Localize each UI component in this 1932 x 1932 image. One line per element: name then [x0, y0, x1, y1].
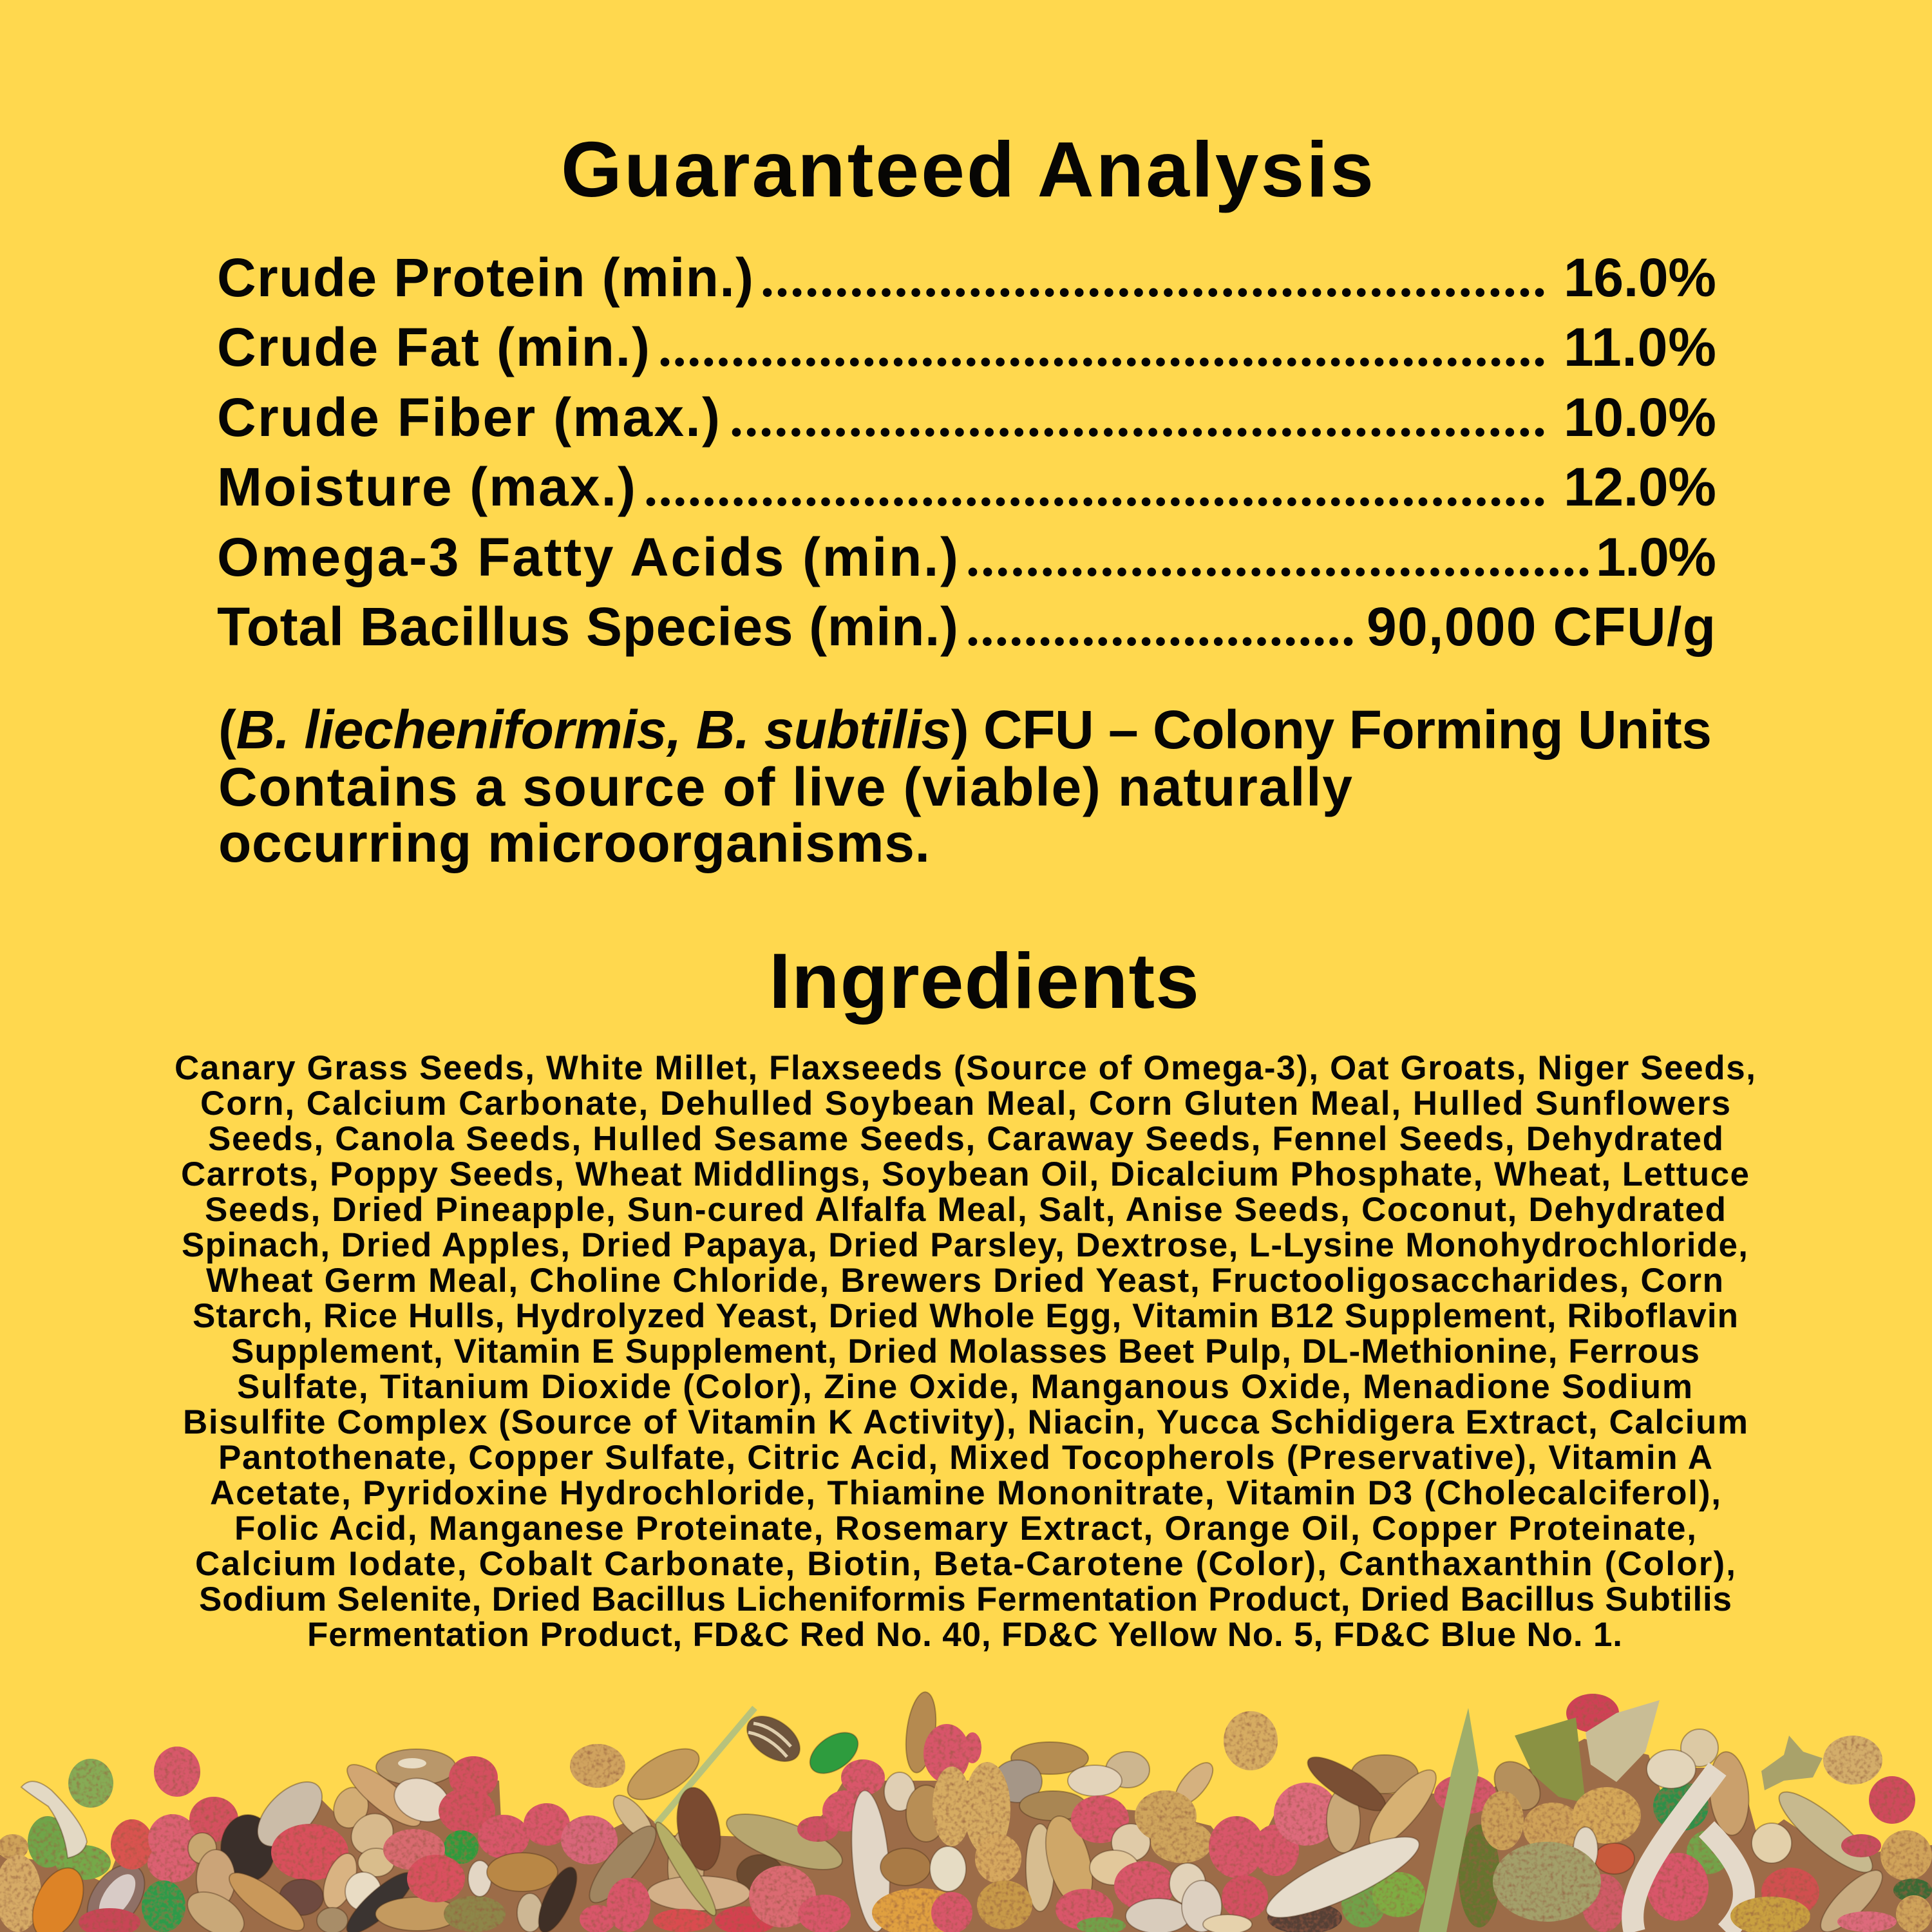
- row: crude fat: .............................................................: [658, 318, 1546, 378]
- row: crude fiber: 10.0%: [1564, 387, 1716, 448]
- row: omega-3: 1.0%: [1596, 527, 1716, 587]
- ingredients list: Canary Grass Seeds, White Millet, Flaxseeds (Source of Omega-3), Oat Groats, Niger Seeds,: [175, 1049, 1756, 1087]
- right seed cluster: [1419, 1694, 1932, 1932]
- ingredients list: [175, 1049, 1756, 1654]
- heading: Ingredients: Ingredients: [769, 937, 1199, 1025]
- grass blade: [1419, 1708, 1479, 1932]
- row: bacillus: ...........................: [966, 598, 1355, 658]
- ingredients list: Seeds, Canola Seeds, Hulled Sesame Seeds, Caraway Seeds, Fennel Seeds, Dehydrated: [208, 1120, 1723, 1158]
- row: crude fiber: Crude Fiber (max.): [217, 387, 720, 448]
- ingredients list: Corn, Calcium Carbonate, Dehulled Soybean Meal, Corn Gluten Meal, Hulled Sunflowers: [200, 1084, 1730, 1122]
- row: moisture: ..............................................................: [644, 458, 1546, 518]
- row: omega-3: ..........................................: [966, 528, 1591, 588]
- row: bacillus: 90,000 CFU/g: [1367, 596, 1716, 657]
- ingredients list: Carrots, Poppy Seeds, Wheat Middlings, Soybean Oil, Dicalcium Phosphate, Wheat, Lettuce: [181, 1155, 1749, 1193]
- ingredients list: Sulfate, Titanium Dioxide (Color), Zine Oxide, Manganous Oxide, Menadione Sodium: [237, 1368, 1692, 1406]
- ingredients list: Folic Acid, Manganese Proteinate, Rosemary Extract, Orange Oil, Copper Proteinate,: [234, 1510, 1696, 1548]
- analysis table: [217, 247, 1716, 658]
- note paragraph: Contains a source of live (viable) naturally: [218, 757, 1352, 817]
- title: Guaranteed Analysis: Guaranteed Analysis: [561, 126, 1374, 213]
- row: moisture: [217, 457, 1716, 518]
- seed and pellet strip along the bottom: [0, 1690, 1932, 1932]
- centre seed cluster: [570, 1690, 972, 1932]
- row: moisture: 12.0%: [1564, 457, 1716, 517]
- ingredients list: Pantothenate, Copper Sulfate, Citric Acid, Mixed Tocopherols (Preservative), Vitamin A: [218, 1439, 1712, 1477]
- row: crude protein: Crude Protein (min.): [217, 247, 753, 308]
- row: crude protein: .....................................................: [761, 249, 1546, 308]
- ingredients list: Acetate, Pyridoxine Hydrochloride, Thiamine Mononitrate, Vitamin D3 (Cholecalciferol),: [210, 1474, 1721, 1512]
- row: omega-3: Omega-3 Fatty Acids (min.): [217, 527, 958, 587]
- ingredients list: Starch, Rice Hulls, Hydrolyzed Yeast, Dried Whole Egg, Vitamin B12 Supplement, Riboflavin: [193, 1297, 1738, 1335]
- row: moisture: Moisture (max.): [217, 457, 636, 517]
- row: crude fat: Crude Fat (min.): [217, 317, 650, 377]
- ingredients list: Calcium Iodate, Cobalt Carbonate, Biotin, Beta-Carotene (Color), Canthaxanthin (Color),: [195, 1545, 1736, 1583]
- ingredients list: Fermentation Product, FD&C Red No. 40, FD&C Yellow No. 5, FD&C Blue No. 1.: [307, 1616, 1622, 1654]
- note paragraph: (B. liecheniformis, B. subtilis) CFU – Colony Forming Units: [218, 699, 1712, 760]
- row: crude fiber: [217, 387, 1716, 448]
- leaf: [1515, 1718, 1586, 1803]
- ingredients list: Seeds, Dried Pineapple, Sun-cured Alfalfa Meal, Salt, Anise Seeds, Coconut, Dehydrated: [205, 1191, 1726, 1229]
- floating leaf flake: [1761, 1736, 1823, 1790]
- note paragraph: occurring microorganisms.: [218, 813, 930, 873]
- pale leaf: [1586, 1700, 1660, 1782]
- row: bacillus: [217, 596, 1716, 658]
- ingredients list: Wheat Germ Meal, Choline Chloride, Brewers Dried Yeast, Fructooligosaccharides, Corn: [206, 1262, 1723, 1300]
- row: omega-3: [217, 527, 1716, 588]
- left seed cluster: [0, 1747, 618, 1932]
- ingredients list: Spinach, Dried Apples, Dried Papaya, Dried Parsley, Dextrose, L-Lysine Monohydrochloride,: [182, 1226, 1748, 1264]
- right-centre seed cluster: [963, 1711, 1446, 1932]
- row: crude protein: [217, 247, 1716, 308]
- row: crude fat: [217, 317, 1716, 378]
- row: crude fiber: .......................................................: [730, 388, 1546, 448]
- ingredients list: Bisulfite Complex (Source of Vitamin K Activity), Niacin, Yucca Schidigera Extract, Calcium: [183, 1403, 1748, 1441]
- row: crude protein: 16.0%: [1564, 247, 1716, 308]
- ingredients list: Sodium Selenite, Dried Bacillus Licheniformis Fermentation Product, Dried Bacillus Subtilis: [199, 1580, 1732, 1618]
- ingredients list: Supplement, Vitamin E Supplement, Dried Molasses Beet Pulp, DL-Methionine, Ferrous: [231, 1332, 1700, 1370]
- row: crude fat: 11.0%: [1564, 317, 1716, 377]
- row: bacillus: Total Bacillus Species (min.): [217, 596, 958, 657]
- coconut strip loop: [1633, 1769, 1744, 1932]
- note paragraph: [218, 699, 1712, 873]
